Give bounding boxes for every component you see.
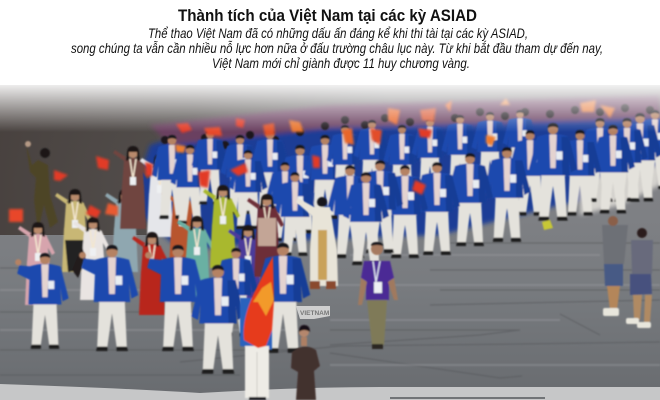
white fade over the top of the photo bbox=[0, 80, 660, 132]
intro line 3: Việt Nam mới chỉ giành được 11 huy chương vàng. bbox=[212, 55, 470, 71]
woman in dark dress bbox=[291, 325, 320, 400]
waving red flags in the crowd bbox=[9, 98, 615, 222]
back rows of the delegation bbox=[130, 95, 660, 250]
front row athletes bbox=[15, 243, 310, 374]
front women in colored dresses bbox=[132, 185, 284, 315]
photo: athletes parade bbox=[0, 85, 660, 400]
flag bearer with Vietnamese flag bbox=[240, 256, 274, 400]
VIETNAM sign on the ground: VIETNAM bbox=[300, 310, 329, 317]
VIETNAM sign on the ground bbox=[296, 306, 330, 319]
stadium ground bbox=[0, 85, 660, 400]
woman in white ao dai bbox=[296, 197, 338, 289]
title: Thành tích của Việt Nam tại các kỳ ASIAD bbox=[178, 6, 477, 25]
intro line 1: Thể thao Việt Nam đã có những dấu ấn đáng kể khi thi tài tại các kỳ ASIAD, bbox=[148, 25, 528, 41]
woman in olive dress on the stage bbox=[25, 141, 58, 232]
intro text bbox=[71, 25, 603, 71]
middle rows of athletes in blue jackets bbox=[151, 110, 660, 265]
head row of the back delegation bbox=[161, 104, 654, 154]
photographers on the right bbox=[602, 216, 653, 328]
official in purple shirt bbox=[358, 242, 398, 349]
left side women and officials bbox=[18, 141, 199, 305]
